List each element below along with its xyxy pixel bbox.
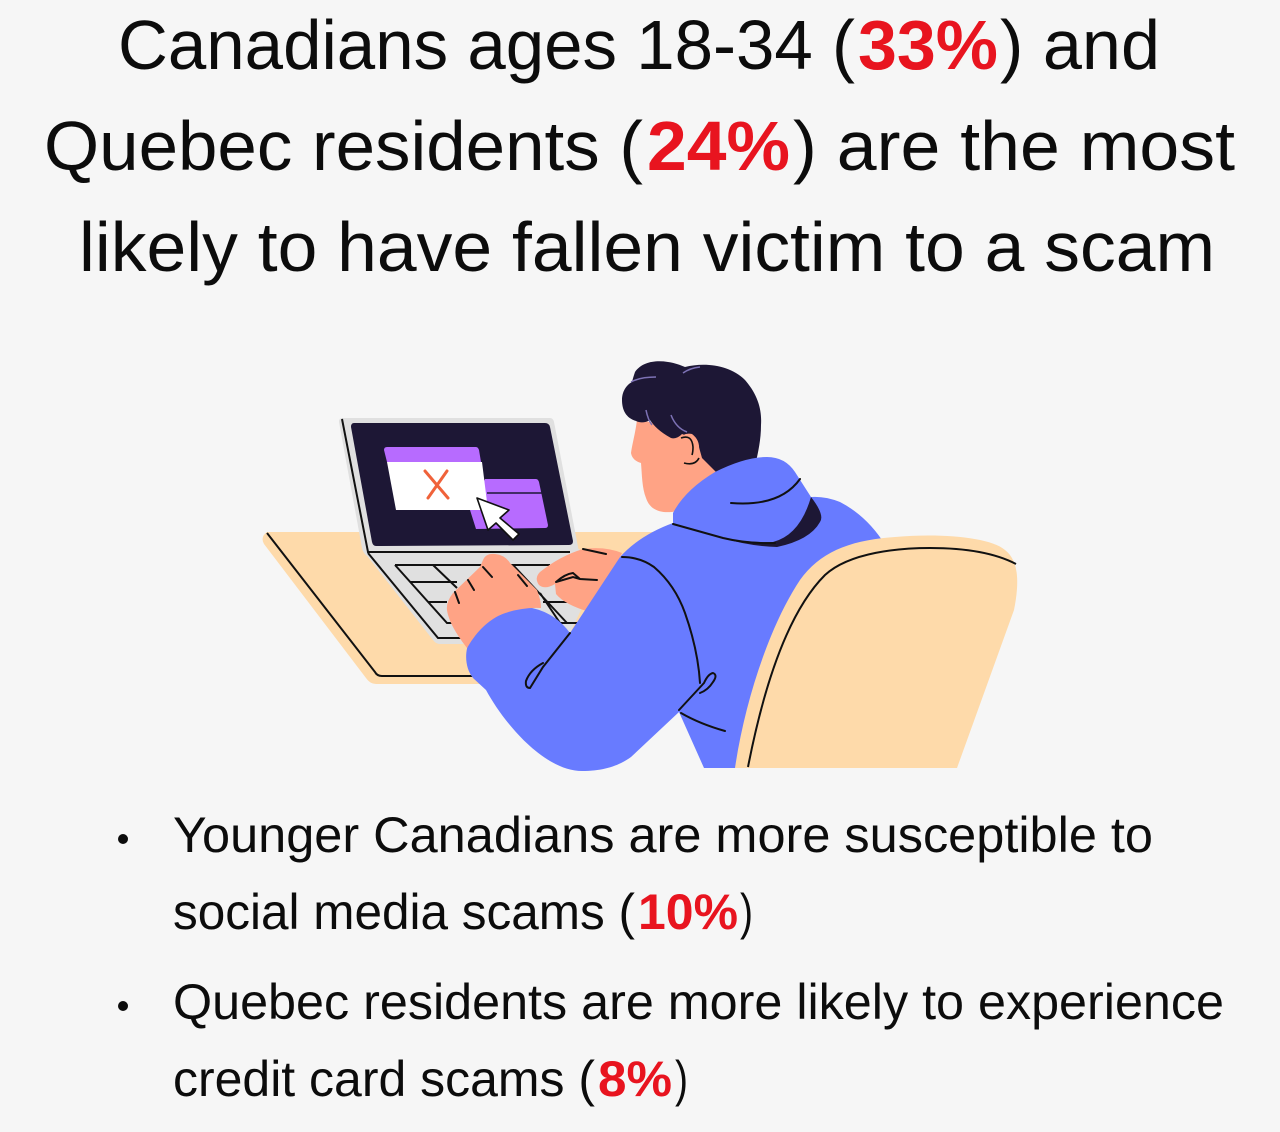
bullet 2: ) [675,1051,688,1107]
title: ) are the most [793,107,1235,185]
cursor [477,498,519,540]
bullet 1: 10% [638,884,738,940]
title: 33% [858,6,998,84]
title: likely to have fallen victim to a scam [79,208,1215,286]
left hand [447,549,606,648]
desk [263,532,660,684]
title: ) and [1000,6,1160,84]
bullet 2: credit card scams ( [173,1051,595,1107]
bullet 2: Quebec residents are more likely to experience [173,974,1224,1030]
bullet 1: ) [740,884,753,940]
title: Canadians ages 18-34 ( [118,6,855,84]
right hand [537,548,622,612]
hoodie body [466,457,882,771]
chair [735,536,1017,768]
illustration: person at laptop [263,361,1017,771]
ear [677,434,699,464]
bullet 1: social media scams ( [173,884,635,940]
error window [384,447,488,510]
bullet 2 [118,974,1224,1107]
bullet 1 [118,807,1153,940]
title: 24% [647,107,790,185]
bullet 2: 8% [598,1051,672,1107]
hood shadow [723,497,821,547]
laptop [339,418,600,644]
head [622,361,761,512]
back window [470,479,548,529]
bullet 1: Younger Canadians are more susceptible to [173,807,1153,863]
title: Quebec residents ( [44,107,643,185]
title [44,6,1235,286]
keyboard [395,565,585,623]
bullet list [118,807,1224,1107]
